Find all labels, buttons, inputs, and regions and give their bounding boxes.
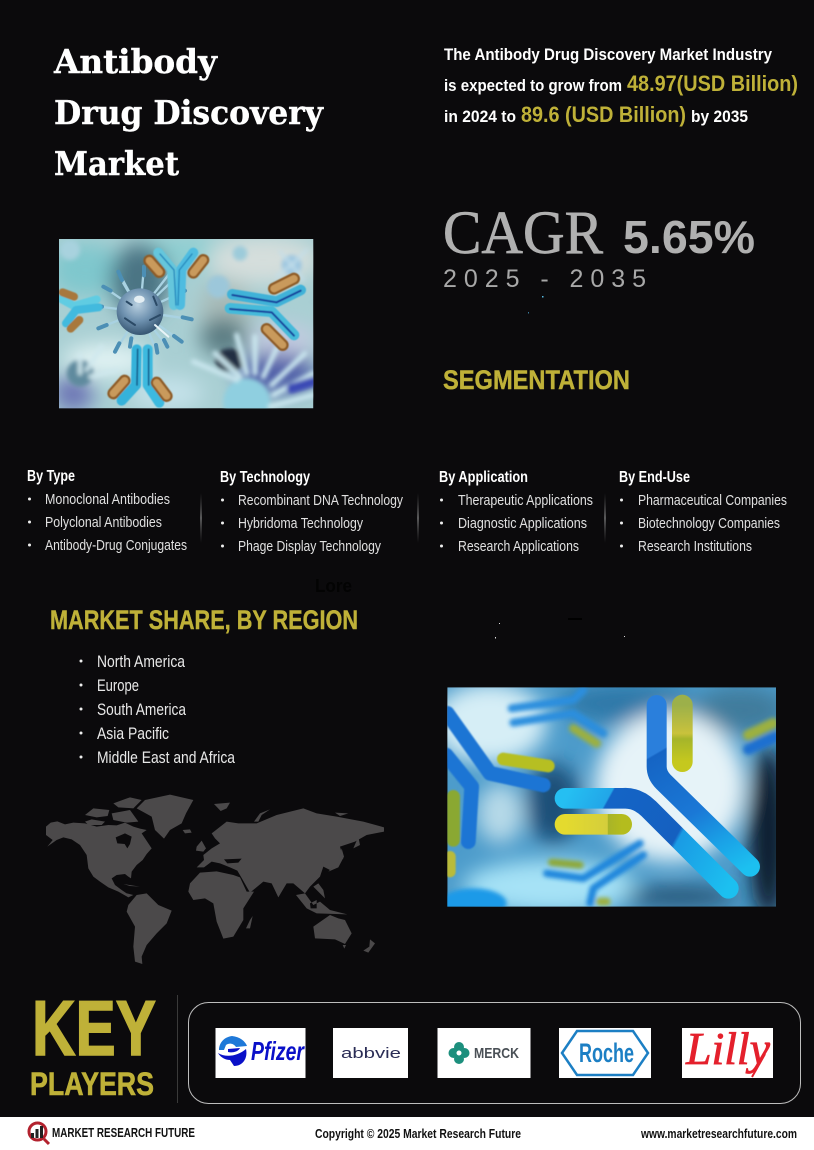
list: regions: Europe — [97, 677, 139, 695]
heading: segmentation: SEGMENTATION — [443, 365, 630, 395]
heading: market share by region: MARKET SHARE, BY REGION — [50, 605, 358, 635]
icon: market research future logo — [29, 1123, 49, 1144]
column: by end-use: Research Institutions — [638, 539, 752, 555]
list: regions: Asia Pacific — [97, 725, 169, 743]
column: by technology — [220, 469, 404, 555]
panel: key player logos — [188, 1002, 800, 1104]
logo: AbbVie — [333, 1028, 408, 1078]
logo: Roche — [559, 1028, 651, 1078]
heading: key players — [30, 984, 156, 1102]
title: Drug Discovery — [54, 93, 324, 132]
CAGR: 2025 - 2035 — [443, 265, 646, 293]
list: regions: South America — [97, 701, 187, 719]
title: Market — [54, 144, 180, 183]
column: by application: Diagnostic Applications — [458, 516, 587, 532]
list: regions — [80, 653, 236, 767]
logo: Pfizer — [216, 1028, 306, 1078]
heading: key players: PLAYERS — [30, 1066, 154, 1102]
virus particle — [93, 267, 192, 353]
column: by type: Polyclonal Antibodies — [45, 515, 162, 531]
faint hidden word: Lore — [315, 576, 352, 596]
antibodies — [60, 253, 301, 403]
list: regions: Middle East and Africa — [97, 749, 236, 767]
column: by type: By Type — [27, 468, 75, 485]
logo: Merck — [438, 1028, 530, 1078]
logo: Merck: MERCK — [474, 1045, 519, 1062]
CAGR: 5.65% — [623, 211, 755, 263]
title: Antibody — [53, 42, 218, 81]
title — [53, 42, 324, 183]
market growth summary: by 2035 — [691, 107, 748, 126]
market growth summary: The Antibody Drug Discovery Market Industry — [444, 45, 772, 64]
footer: MARKET RESEARCH FUTURE — [52, 1125, 195, 1140]
column: by end-use: Biotechnology Companies — [638, 516, 780, 532]
column: by technology: Recombinant DNA Technology — [238, 493, 404, 509]
world map — [46, 795, 384, 964]
panel: segmentation columns — [27, 468, 787, 555]
footer — [0, 1117, 814, 1150]
column: by technology: Phage Display Technology — [238, 539, 382, 555]
column: by technology: Hybridoma Technology — [238, 516, 364, 532]
column: by technology: By Technology — [220, 469, 310, 486]
logo: Roche: Roche — [579, 1038, 634, 1068]
column: by application — [439, 469, 593, 555]
image: antibody close-up — [447, 687, 776, 907]
CAGR — [443, 200, 755, 293]
footer: Copyright © 2025 Market Research Future — [315, 1126, 521, 1141]
list: regions: North America — [97, 653, 186, 671]
market growth summary: in 2024 to — [444, 107, 516, 126]
column: by type — [27, 468, 187, 554]
column: by application: Research Applications — [458, 539, 579, 555]
column: by type: Monoclonal Antibodies — [45, 492, 170, 508]
column: by end-use — [619, 469, 787, 555]
heading: key players: KEY — [32, 984, 156, 1072]
column: by application: Therapeutic Applications — [458, 493, 593, 509]
column: by end-use: Pharmaceutical Companies — [638, 493, 787, 509]
column: by application: By Application — [439, 469, 528, 486]
market growth summary: is expected to grow from — [444, 76, 622, 95]
logo: AbbVie: abbvie — [341, 1045, 401, 1062]
logo: Pfizer: Pfizer — [251, 1036, 305, 1066]
column: by type: Antibody-Drug Conjugates — [45, 538, 187, 554]
market growth summary: 48.97(USD Billion) — [627, 71, 798, 96]
image: antibodies attacking virus — [59, 239, 314, 408]
market growth summary — [444, 45, 798, 127]
column: by end-use: By End-Use — [619, 469, 690, 486]
market growth summary: 89.6 (USD Billion) — [521, 102, 686, 127]
logo: Lilly: Lilly — [685, 1023, 771, 1074]
CAGR: CAGR — [443, 200, 603, 267]
